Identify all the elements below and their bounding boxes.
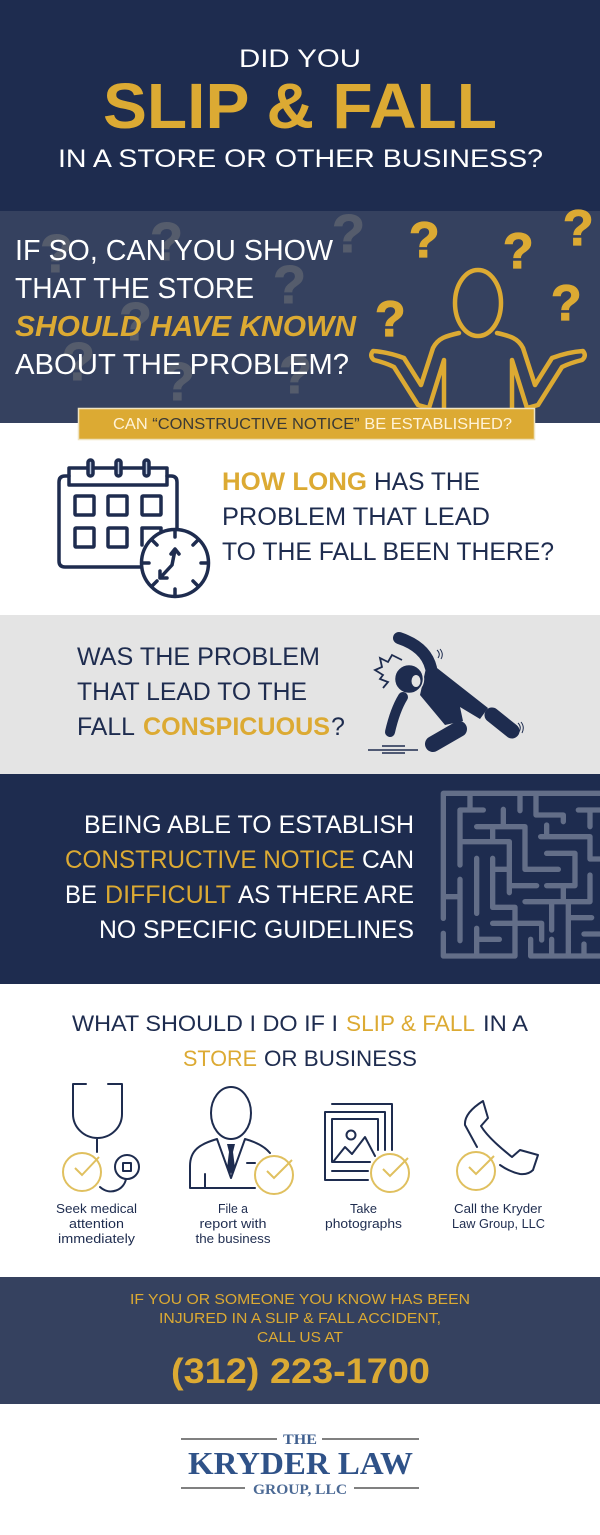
text: establishing constructive notice: NO SPECIFIC GUIDELINES <box>99 916 414 944</box>
item: take photographs <box>325 1104 409 1231</box>
caption: Call the Kryder <box>454 1202 542 1216</box>
text: injured call us: CALL US AT <box>257 1329 343 1346</box>
icon: calendar and clock <box>59 460 208 596</box>
heading: what should i do: WHAT SHOULD I DO IF I <box>72 1011 338 1036</box>
text: can you show the store should have known <box>15 235 357 381</box>
background question marks: ? <box>162 352 195 412</box>
text: establishing constructive notice: DIFFICULT <box>105 881 231 909</box>
item: seek medical attention <box>56 1084 139 1246</box>
icons: gold question marks: ? <box>551 275 582 331</box>
caption: report with <box>200 1217 267 1231</box>
caption <box>196 1202 270 1246</box>
item: call the kryder law group <box>452 1101 545 1231</box>
caption <box>325 1202 402 1231</box>
icons: gold question marks <box>375 200 594 347</box>
text: how long: HOW LONG <box>222 468 367 496</box>
text: establishing constructive notice: CONSTRUCTIVE NOTICE <box>65 846 355 874</box>
icon: person falling <box>368 638 523 753</box>
heading: what should i do <box>72 1011 528 1071</box>
caption: Seek medical <box>56 1202 137 1216</box>
caption <box>56 1202 137 1246</box>
panel: title header <box>0 0 600 211</box>
heading: slip and fall: SLIP & FALL <box>103 70 497 142</box>
background question marks: ? <box>279 345 312 405</box>
text: injured call us: INJURED IN A SLIP & FALL ACCIDENT, <box>159 1310 441 1327</box>
text: establishing constructive notice: BE <box>65 881 97 909</box>
logo: the kryder law group <box>181 1432 419 1498</box>
background question marks: ? <box>40 224 73 284</box>
text: can you show the store should have known: THAT THE STORE <box>15 273 254 305</box>
heading: what should i do: OR BUSINESS <box>264 1046 417 1071</box>
text: was the problem conspicuous: ? <box>331 713 345 741</box>
caption: the business <box>196 1232 270 1246</box>
icons: gold question marks: ? <box>375 291 406 347</box>
icon: businessman <box>190 1087 293 1194</box>
icon: maze <box>443 793 600 956</box>
icon: stethoscope <box>63 1084 139 1191</box>
background question marks <box>40 204 365 412</box>
logo: the kryder law group: KRYDER LAW <box>188 1445 413 1481</box>
icons: gold question marks: ? <box>409 212 440 268</box>
icon: telephone <box>457 1101 538 1190</box>
text: how long <box>222 468 554 566</box>
text: establishing constructive notice: AS THERE ARE <box>238 881 414 909</box>
panel: should have known <box>0 200 600 440</box>
text: injured call us <box>130 1291 470 1346</box>
panel: constructive notice difficult <box>0 774 600 984</box>
background question marks: ? <box>119 292 152 352</box>
text: was the problem conspicuous <box>77 643 345 741</box>
text: can you show the store should have known: ABOUT THE PROBLEM? <box>15 349 349 381</box>
background question marks: ? <box>62 332 95 392</box>
background question marks: ? <box>150 212 183 272</box>
heading: what should i do: SLIP & FALL <box>346 1011 475 1036</box>
panel: call to action <box>0 1277 600 1404</box>
text: can you show the store should have known: SHOULD HAVE KNOWN <box>15 311 357 343</box>
caption: immediately <box>58 1232 136 1246</box>
text: how long: HAS THE <box>374 468 480 496</box>
caption: File a <box>218 1202 248 1216</box>
caption: Take <box>350 1202 377 1216</box>
item: file a report <box>190 1087 293 1246</box>
text: was the problem conspicuous: CONSPICUOUS <box>143 713 330 741</box>
text: can you show the store should have known: IF SO, CAN YOU SHOW <box>15 235 334 267</box>
callout: constructive notice banner <box>78 408 534 440</box>
heading: what should i do: STORE <box>183 1046 257 1071</box>
icon: confused person shrugging <box>371 270 585 412</box>
panel: what should i do <box>56 1011 545 1246</box>
text: injured call us: IF YOU OR SOMEONE YOU KNOW HAS BEEN <box>130 1291 470 1308</box>
text: establishing constructive notice: BEING ABLE TO ESTABLISH <box>84 811 414 839</box>
heading: did you: DID YOU <box>239 45 361 73</box>
caption <box>452 1202 545 1231</box>
heading: in a store or other business: IN A STORE OR OTHER BUSINESS? <box>58 145 543 173</box>
caption: photographs <box>325 1217 402 1231</box>
text: was the problem conspicuous: FALL <box>77 713 135 741</box>
caption: attention <box>69 1217 124 1231</box>
panel: how long <box>59 460 554 596</box>
callout: constructive notice banner: CAN “CONSTRUCTIVE NOTICE” BE ESTABLISHED? <box>113 416 512 433</box>
text: was the problem conspicuous: THAT LEAD TO THE <box>77 678 307 706</box>
text: establishing constructive notice: CAN <box>362 846 414 874</box>
icons: gold question marks: ? <box>563 200 594 256</box>
text: establishing constructive notice <box>65 811 414 944</box>
panel: conspicuous <box>0 615 600 774</box>
background question marks: ? <box>273 255 306 315</box>
background question marks: ? <box>332 204 365 264</box>
icons: gold question marks: ? <box>503 223 534 279</box>
heading: what should i do: IN A <box>483 1011 528 1036</box>
icon: photographs <box>325 1104 409 1192</box>
text: how long: TO THE FALL BEEN THERE? <box>222 538 554 566</box>
phone number: (312) 223-1700 <box>171 1352 430 1391</box>
logo: the kryder law group: THE <box>283 1432 317 1448</box>
text: was the problem conspicuous: WAS THE PROBLEM <box>77 643 320 671</box>
caption: Law Group, LLC <box>452 1217 545 1231</box>
logo: the kryder law group: GROUP, LLC <box>253 1482 347 1498</box>
text: how long: PROBLEM THAT LEAD <box>222 503 490 531</box>
